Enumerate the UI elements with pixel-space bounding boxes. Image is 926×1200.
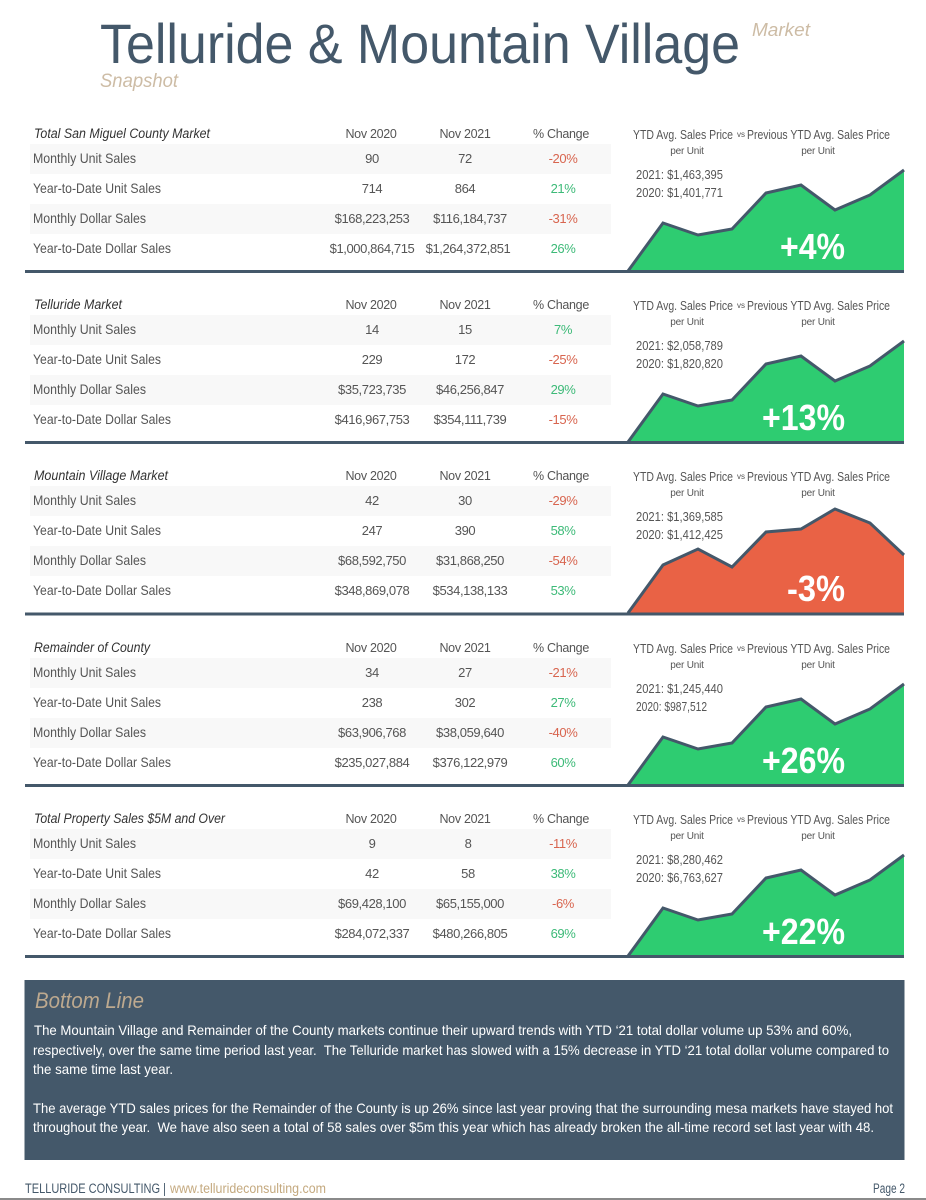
area chart: YTD average sales price -3%: -3% xyxy=(787,568,845,609)
table: Total San Miguel County Market: -31% xyxy=(549,211,578,226)
table: Total Property Sales $5M and Over: 8 xyxy=(465,836,472,851)
footer: www.tellurideconsulting.com xyxy=(169,1181,326,1196)
area chart: YTD average sales price +22%: per Unit xyxy=(801,831,835,842)
panel: Remainder of County xyxy=(25,640,904,787)
table: Total San Miguel County Market: Year-to-Date Unit Sales xyxy=(33,180,161,196)
table: Total San Miguel County Market: Nov 2021 xyxy=(439,127,491,141)
footer xyxy=(0,1181,926,1200)
table: Total Property Sales $5M and Over: -6% xyxy=(552,896,575,911)
table: Total Property Sales $5M and Over: $69,428,100 xyxy=(338,896,406,911)
table: Mountain Village Market: 247 xyxy=(362,523,382,538)
area chart: YTD average sales price -3%: YTD Avg. Sales Price xyxy=(633,469,733,484)
table: Total Property Sales $5M and Over: 38% xyxy=(551,866,576,881)
table: Mountain Village Market xyxy=(30,468,611,598)
table: Telluride Market: $416,967,753 xyxy=(335,412,410,427)
text block: Bottom Line commentary: throughout the year. We have also seen a total of 58 sales over $5m this year which has already broken the all-time record set last year with 48. xyxy=(33,1119,874,1135)
title: Market xyxy=(752,20,811,40)
table: Mountain Village Market: $348,869,078 xyxy=(335,583,410,598)
table: Mountain Village Market: -29% xyxy=(549,493,578,508)
table: Telluride Market: 229 xyxy=(362,352,382,367)
table: Total San Miguel County Market: 90 xyxy=(365,151,379,166)
area chart: YTD average sales price +13%: vs xyxy=(737,301,745,310)
table: Telluride Market: Telluride Market xyxy=(34,297,123,312)
table: Telluride Market: $35,723,735 xyxy=(338,382,406,397)
table: Remainder of County: 60% xyxy=(551,755,576,770)
area chart: YTD average sales price +26%: vs xyxy=(737,644,745,653)
table: Total Property Sales $5M and Over: Year-to-Date Unit Sales xyxy=(33,865,161,881)
table: Total San Miguel County Market: 72 xyxy=(458,151,472,166)
table: Telluride Market: Year-to-Date Unit Sales xyxy=(33,351,161,367)
table: Mountain Village Market: Monthly Dollar Sales xyxy=(33,552,146,568)
area chart: YTD average sales price +22%: vs xyxy=(737,815,745,824)
area chart: YTD average sales price +26%: per Unit xyxy=(670,660,704,671)
table: Remainder of County: 238 xyxy=(362,695,382,710)
table: Total San Miguel County Market: % Change xyxy=(533,127,589,141)
area chart: YTD average sales price -3%: per Unit xyxy=(670,488,704,499)
table: Remainder of County: -40% xyxy=(549,725,578,740)
footer: Page 2 xyxy=(873,1181,905,1196)
table: Telluride Market: Nov 2021 xyxy=(439,298,491,312)
table: Remainder of County: 27 xyxy=(458,665,472,680)
table: Total Property Sales $5M and Over xyxy=(30,811,611,941)
table: Mountain Village Market: -54% xyxy=(549,553,578,568)
table: Total San Miguel County Market: $168,223,253 xyxy=(335,211,410,226)
table: Total San Miguel County Market: 26% xyxy=(551,241,576,256)
area chart: YTD average sales price +4%: +4% xyxy=(780,226,845,267)
panel: Telluride Market xyxy=(25,297,904,444)
table: Total San Miguel County Market xyxy=(30,126,611,256)
title: Telluride & Mountain Village xyxy=(100,12,740,75)
table: Telluride Market: 7% xyxy=(554,322,573,337)
table: Telluride Market: $354,111,739 xyxy=(434,412,507,427)
table: Remainder of County: -21% xyxy=(549,665,578,680)
table: Total Property Sales $5M and Over: 9 xyxy=(369,836,376,851)
area chart: YTD average sales price +22%: 2021: $8,280,462 xyxy=(636,853,723,867)
panel: Total Property Sales $5M and Over xyxy=(25,811,904,958)
table: Total San Miguel County Market: $116,184,737 xyxy=(433,211,507,226)
area chart: YTD average sales price -3%: 2020: $1,412,425 xyxy=(636,528,723,542)
table: Telluride Market: $46,256,847 xyxy=(436,382,504,397)
table: Total San Miguel County Market: 21% xyxy=(551,181,576,196)
table: Telluride Market: -15% xyxy=(549,412,578,427)
area chart: YTD average sales price +13%: +13% xyxy=(762,397,845,438)
table: Total San Miguel County Market: 864 xyxy=(455,181,475,196)
table: Total Property Sales $5M and Over: % Change xyxy=(533,812,589,826)
table: Remainder of County: Year-to-Date Dollar Sales xyxy=(33,754,171,770)
table: Total San Miguel County Market: -20% xyxy=(549,151,578,166)
table: Mountain Village Market: Monthly Unit Sales xyxy=(33,492,136,508)
table: Total Property Sales $5M and Over: $284,072,337 xyxy=(335,926,410,941)
table: Total Property Sales $5M and Over: Monthly Dollar Sales xyxy=(33,895,146,911)
area chart: YTD average sales price +13%: per Unit xyxy=(801,317,835,328)
table: Remainder of County: Nov 2021 xyxy=(439,641,491,655)
table: Remainder of County: 27% xyxy=(551,695,576,710)
table: Remainder of County: $38,059,640 xyxy=(436,725,504,740)
table: Mountain Village Market: Nov 2020 xyxy=(345,469,397,483)
table: Remainder of County: $376,122,979 xyxy=(433,755,508,770)
table: Mountain Village Market: Nov 2021 xyxy=(439,469,491,483)
area chart: YTD average sales price +26%: 2021: $1,245,440 xyxy=(636,682,723,696)
table: Total Property Sales $5M and Over: Monthly Unit Sales xyxy=(33,835,136,851)
area chart: YTD average sales price +26%: +26% xyxy=(762,740,845,781)
panel: Bottom Line xyxy=(24,980,904,1160)
area chart: YTD average sales price +13% xyxy=(628,298,904,442)
area chart: YTD average sales price +4%: per Unit xyxy=(670,146,704,157)
table: Remainder of County: % Change xyxy=(533,641,589,655)
table: Total Property Sales $5M and Over: 58 xyxy=(461,866,475,881)
table: Total Property Sales $5M and Over: 42 xyxy=(365,866,379,881)
table: Remainder of County xyxy=(30,640,611,770)
table: Total San Miguel County Market: $1,264,372,851 xyxy=(426,241,511,256)
area chart: YTD average sales price +13%: 2020: $1,820,820 xyxy=(636,357,723,371)
table: Mountain Village Market: $68,592,750 xyxy=(338,553,406,568)
heading: Bottom Line: Bottom Line xyxy=(35,988,144,1013)
title: Snapshot xyxy=(100,71,179,92)
table: Mountain Village Market: % Change xyxy=(533,469,589,483)
table: Remainder of County: Nov 2020 xyxy=(345,641,397,655)
area chart: YTD average sales price +22%: per Unit xyxy=(670,831,704,842)
area chart: YTD average sales price +4% xyxy=(628,127,904,271)
area chart: YTD average sales price +26%: YTD Avg. Sales Price xyxy=(633,641,733,656)
text block: Bottom Line commentary xyxy=(33,1022,893,1135)
table: Total San Miguel County Market: 714 xyxy=(362,181,382,196)
table: Telluride Market: 172 xyxy=(455,352,475,367)
area chart: YTD average sales price +4%: 2020: $1,401,771 xyxy=(636,186,723,200)
table: Mountain Village Market: 390 xyxy=(455,523,475,538)
table: Remainder of County: Remainder of County xyxy=(34,640,151,655)
table: Total San Miguel County Market: Total San Miguel County Market xyxy=(34,126,211,141)
table: Telluride Market: Year-to-Date Dollar Sales xyxy=(33,411,171,427)
table: Telluride Market: 14 xyxy=(365,322,379,337)
area chart: YTD average sales price +26%: per Unit xyxy=(801,660,835,671)
area chart: YTD average sales price +26% xyxy=(628,641,904,785)
area chart: YTD average sales price -3%: per Unit xyxy=(801,488,835,499)
area chart: YTD average sales price -3%: Previous YTD Avg. Sales Price xyxy=(747,469,890,484)
panel: Mountain Village Market xyxy=(25,468,904,616)
table: Remainder of County: Monthly Unit Sales xyxy=(33,664,136,680)
table: Telluride Market: 29% xyxy=(551,382,576,397)
table: Total San Miguel County Market: Monthly Dollar Sales xyxy=(33,210,146,226)
table: Mountain Village Market: 53% xyxy=(551,583,576,598)
area chart: YTD average sales price +22%: +22% xyxy=(762,911,845,952)
table: Telluride Market: -25% xyxy=(549,352,578,367)
table: Remainder of County: 302 xyxy=(455,695,475,710)
table: Mountain Village Market: $31,868,250 xyxy=(436,553,504,568)
table: Remainder of County: Year-to-Date Unit Sales xyxy=(33,694,161,710)
table: Total Property Sales $5M and Over: -11% xyxy=(549,836,578,851)
area chart: YTD average sales price -3%: vs xyxy=(737,472,745,481)
panel: Total San Miguel County Market xyxy=(25,126,904,273)
area chart: YTD average sales price +13%: per Unit xyxy=(670,317,704,328)
text block: Bottom Line commentary: The Mountain Village and Remainder of the County markets continue their upward trends with YTD ‘21 total dollar volume up 53% and 60%, xyxy=(34,1022,852,1038)
table: Total San Miguel County Market: Year-to-Date Dollar Sales xyxy=(33,240,171,256)
area chart: YTD average sales price +13%: Previous YTD Avg. Sales Price xyxy=(747,298,890,313)
area chart: YTD average sales price +13%: YTD Avg. Sales Price xyxy=(633,298,733,313)
area chart: YTD average sales price +4%: YTD Avg. Sales Price xyxy=(633,127,733,142)
table: Total Property Sales $5M and Over: Nov 2020 xyxy=(345,812,397,826)
table: Mountain Village Market: Mountain Village Market xyxy=(34,468,169,483)
table: Mountain Village Market: 42 xyxy=(365,493,379,508)
text block: Bottom Line commentary: the same time last year. xyxy=(33,1061,173,1077)
table: Telluride Market: % Change xyxy=(533,298,589,312)
area chart: YTD average sales price +4%: Previous YTD Avg. Sales Price xyxy=(747,127,890,142)
area chart: YTD average sales price +22%: 2020: $6,763,627 xyxy=(636,871,723,885)
table: Total Property Sales $5M and Over: 69% xyxy=(551,926,576,941)
table: Mountain Village Market: 30 xyxy=(458,493,472,508)
area chart: YTD average sales price +13%: 2021: $2,058,789 xyxy=(636,339,723,353)
table: Mountain Village Market: 58% xyxy=(551,523,576,538)
table: Total Property Sales $5M and Over: Total Property Sales $5M and Over xyxy=(34,811,225,826)
area chart: YTD average sales price +26%: Previous YTD Avg. Sales Price xyxy=(747,641,890,656)
table: Total Property Sales $5M and Over: Year-to-Date Dollar Sales xyxy=(33,925,171,941)
area chart: YTD average sales price -3% xyxy=(628,469,904,613)
area chart: YTD average sales price +4%: vs xyxy=(737,130,745,139)
table: Mountain Village Market: Year-to-Date Dollar Sales xyxy=(33,582,171,598)
table: Remainder of County: $235,027,884 xyxy=(335,755,410,770)
table: Telluride Market: Monthly Unit Sales xyxy=(33,321,136,337)
area chart: YTD average sales price +22%: Previous YTD Avg. Sales Price xyxy=(747,812,890,827)
table: Telluride Market: Nov 2020 xyxy=(345,298,397,312)
area chart: YTD average sales price +22% xyxy=(628,812,904,956)
table: Total San Miguel County Market: Monthly Unit Sales xyxy=(33,150,136,166)
table: Remainder of County: 34 xyxy=(365,665,379,680)
table: Telluride Market: 15 xyxy=(458,322,472,337)
table: Telluride Market: Monthly Dollar Sales xyxy=(33,381,146,397)
table: Mountain Village Market: Year-to-Date Unit Sales xyxy=(33,522,161,538)
table: Total Property Sales $5M and Over: Nov 2021 xyxy=(439,812,491,826)
table: Total San Miguel County Market: $1,000,864,715 xyxy=(330,241,415,256)
area chart: YTD average sales price -3%: 2021: $1,369,585 xyxy=(636,510,723,524)
text block: Bottom Line commentary: respectively, over the same time period last year. The Telluride market has slowed with a 15% decrease in YTD ‘21 total dollar volume compared to xyxy=(33,1042,889,1058)
area chart: YTD average sales price +22%: YTD Avg. Sales Price xyxy=(633,812,733,827)
table: Remainder of County: Monthly Dollar Sales xyxy=(33,724,146,740)
area chart: YTD average sales price +4%: 2021: $1,463,395 xyxy=(636,168,723,182)
area chart: YTD average sales price +26%: 2020: $987,512 xyxy=(636,700,707,714)
footer: TELLURIDE CONSULTING | xyxy=(25,1181,166,1196)
table: Total Property Sales $5M and Over: $65,155,000 xyxy=(436,896,504,911)
table: Total San Miguel County Market: Nov 2020 xyxy=(345,127,397,141)
area chart: YTD average sales price +4%: per Unit xyxy=(801,146,835,157)
table: Total Property Sales $5M and Over: $480,266,805 xyxy=(433,926,508,941)
table: Mountain Village Market: $534,138,133 xyxy=(433,583,508,598)
table: Remainder of County: $63,906,768 xyxy=(338,725,406,740)
table: Telluride Market xyxy=(30,297,611,427)
